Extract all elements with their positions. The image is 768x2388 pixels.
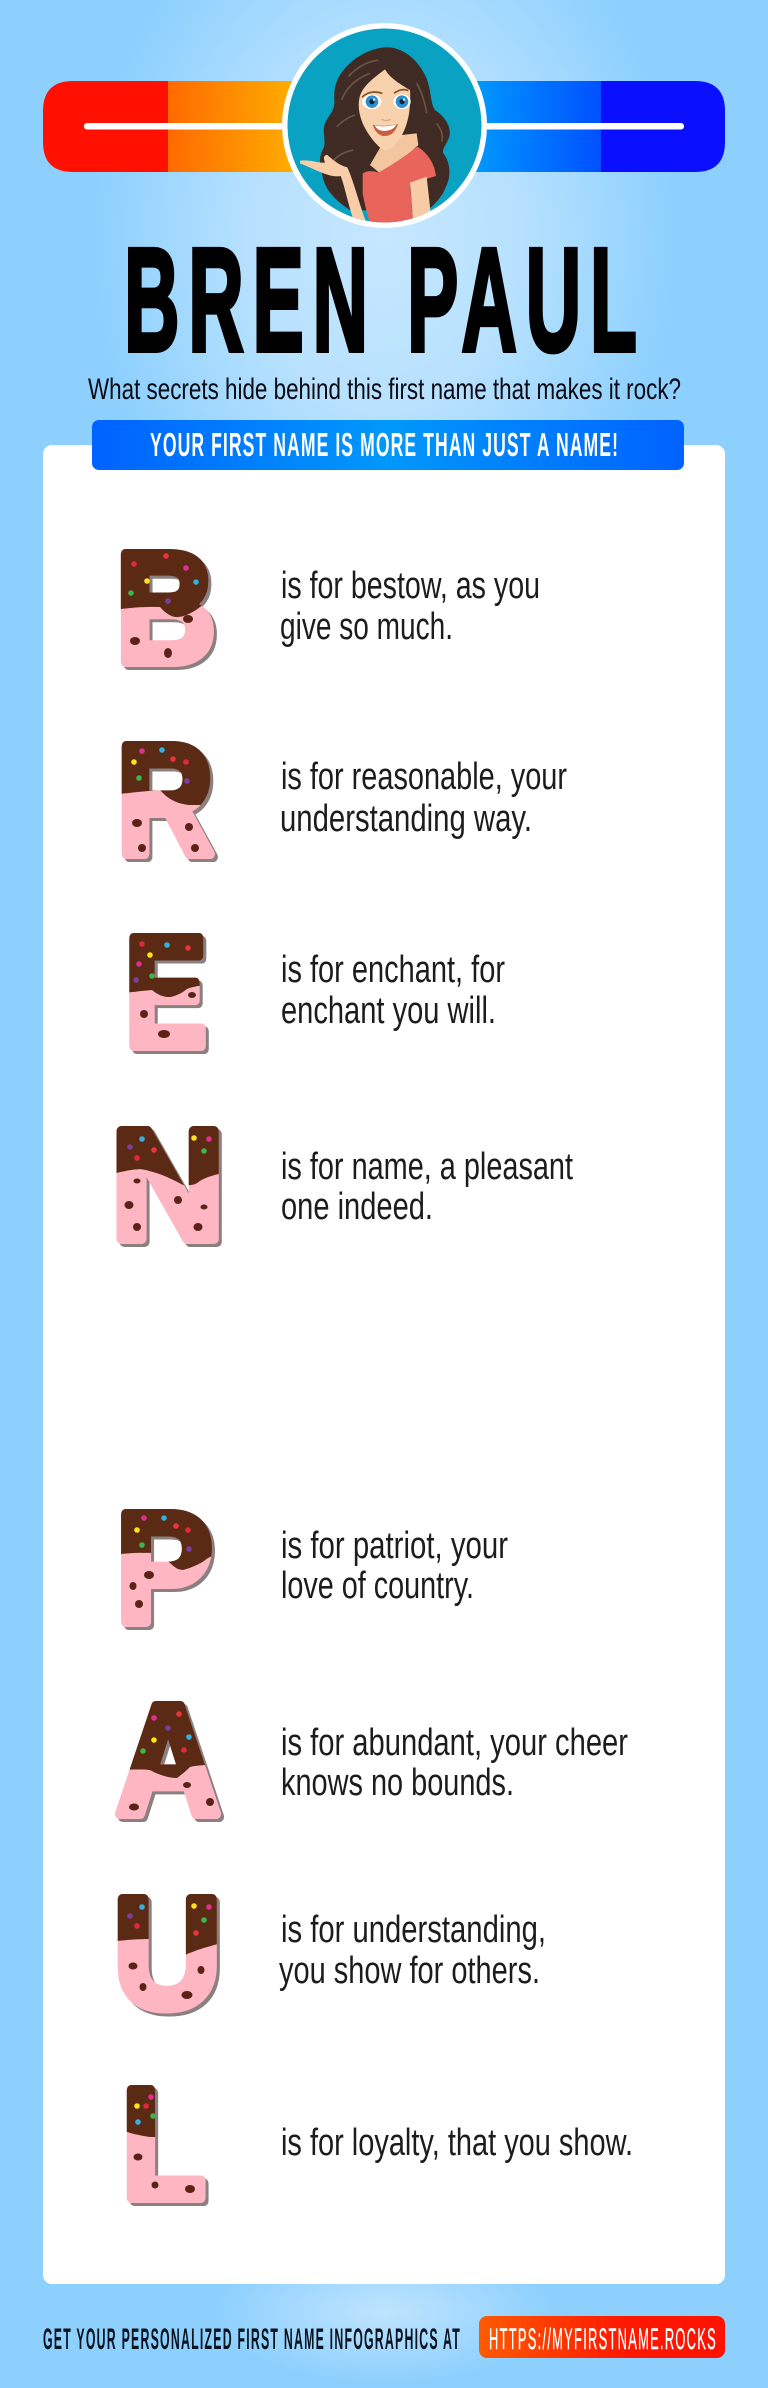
- icon: chocolate letter U: U: [116, 1869, 224, 2044]
- icon: chocolate letter B: B: [119, 524, 219, 699]
- text: P line: love of country.: [281, 1565, 474, 1607]
- icon: chocolate letter R: R: [117, 712, 213, 887]
- text: B line: [280, 565, 540, 648]
- text: P line: [281, 1525, 508, 1607]
- icon: chocolate letter L: [126, 2085, 209, 2206]
- text: R line: understanding way.: [280, 798, 532, 840]
- icon: chocolate letter E: E: [125, 904, 207, 1079]
- text: U line: you show for others.: [279, 1950, 540, 1992]
- icon: chocolate letter E: E: [128, 907, 210, 1082]
- neck: [370, 133, 418, 173]
- icon: chocolate letter R: R: [117, 712, 213, 887]
- nose and mouth: [373, 119, 398, 136]
- ribbon left segment: red and orange: [43, 81, 293, 172]
- eyes: [362, 90, 411, 109]
- icon: chocolate letter P: P: [116, 1479, 212, 1655]
- icon: chocolate letter B: [120, 549, 217, 670]
- text: A line: knows no bounds.: [281, 1762, 514, 1804]
- row: letter L: [126, 2085, 630, 2206]
- text: B line: is for bestow, as you: [281, 565, 540, 607]
- text: P line: is for patriot, your: [281, 1525, 508, 1567]
- text: U line: is for understanding,: [281, 1909, 546, 1951]
- icon: chocolate letter E: [129, 933, 209, 1054]
- icon: chocolate letter A: A: [116, 1671, 220, 1847]
- text: N line: one indeed.: [281, 1186, 433, 1228]
- icon: chocolate letter L: L: [125, 2060, 208, 2235]
- text: E line: enchant you will.: [281, 990, 496, 1032]
- icon: chocolate letter U: U: [114, 1866, 221, 2041]
- panel: white content card: [43, 445, 725, 2284]
- ribbon white line: [84, 123, 684, 130]
- icon: chocolate letter N: [116, 1126, 222, 1247]
- row: letter P: [121, 1509, 508, 1630]
- text: R line: [280, 756, 567, 840]
- icon: chocolate letter A: A: [116, 1671, 220, 1847]
- text: B line: give so much.: [280, 606, 453, 648]
- icon: chocolate letter B: B: [116, 521, 216, 696]
- icon: chocolate letter P: [121, 1509, 215, 1630]
- text: A line: [281, 1722, 628, 1804]
- icon: chocolate letter P: P: [119, 1482, 215, 1658]
- text: E line: is for enchant, for: [281, 949, 505, 991]
- footer url button: [479, 2316, 725, 2358]
- icon: chocolate letter L: L: [122, 2057, 205, 2232]
- icon: chocolate letter L: L: [122, 2057, 205, 2232]
- text: L line: is for loyalty, that you show.: [281, 2122, 633, 2164]
- icon: chocolate letter N: N: [111, 1098, 224, 1273]
- icon: woman avatar in circle: [282, 23, 487, 228]
- banner: [92, 420, 684, 470]
- icon: chocolate letter U: [118, 1894, 220, 2016]
- icon: chocolate letter U: U: [114, 1866, 221, 2041]
- right arm: [410, 176, 430, 218]
- title: BREN PAUL: [124, 218, 646, 382]
- icon: chocolate letter P: P: [116, 1479, 212, 1655]
- icon: chocolate letter A: [115, 1701, 224, 1822]
- text: N line: is for name, a pleasant: [281, 1146, 573, 1188]
- icon: chocolate letter R: [122, 741, 218, 862]
- row: letter B: [120, 549, 538, 670]
- left arm and hand: [300, 155, 367, 223]
- row: letter R: [122, 741, 567, 862]
- text: N line: [281, 1146, 573, 1228]
- icon: chocolate letter N: N: [114, 1101, 227, 1276]
- icon: chocolate letter R: R: [120, 715, 216, 890]
- ribbon right segment: blue: [476, 81, 725, 172]
- row: letter E: [129, 933, 505, 1054]
- text: R line: is for reasonable, your: [281, 756, 567, 798]
- text: A line: is for abundant, your cheer: [281, 1722, 628, 1764]
- icon: chocolate letter A: A: [119, 1674, 223, 1850]
- text: U line: [279, 1909, 546, 1992]
- row: letter N: [116, 1126, 573, 1247]
- icon: chocolate letter E: E: [125, 904, 207, 1079]
- row: letter U: [118, 1894, 544, 2016]
- shirt: [363, 147, 436, 223]
- header ribbon bar: [43, 81, 725, 172]
- icon: chocolate letter N: N: [111, 1098, 224, 1273]
- text: E line: [281, 949, 505, 1032]
- row: letter A: [115, 1701, 628, 1822]
- face: [359, 69, 410, 150]
- icon: chocolate letter B: B: [116, 521, 216, 696]
